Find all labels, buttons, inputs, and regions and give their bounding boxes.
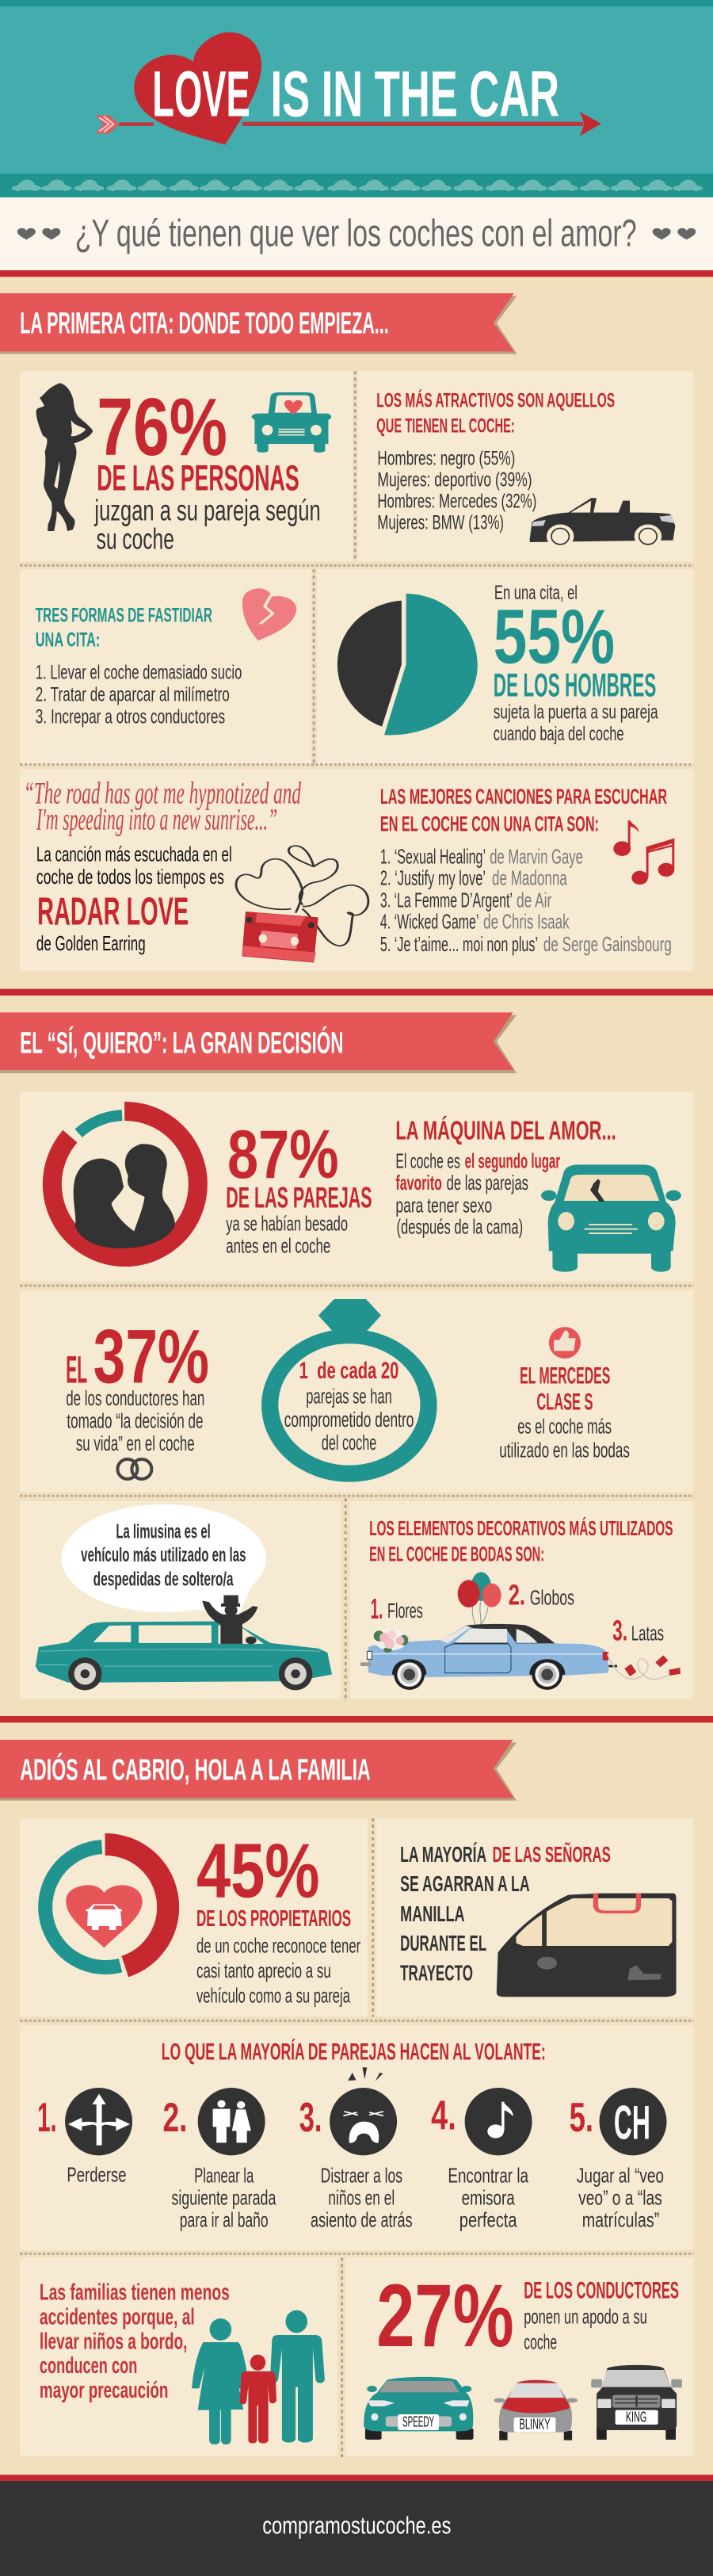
plate: king: KING: [626, 2409, 646, 2425]
pie chart: [337, 594, 478, 735]
divider: [312, 569, 316, 766]
icon: convertible car: [530, 498, 675, 548]
red divider: [0, 2475, 713, 2482]
text: la canción más escuchada: [36, 843, 232, 889]
item 5: jugar: 5.: [570, 2095, 593, 2140]
panel: estadísticas de boda: parejas se han: [306, 1384, 392, 1408]
text: segundo lugar: [395, 1149, 560, 1238]
item 2: planear parada: Planear la: [194, 2164, 254, 2187]
panel: limusina: vehículo más utilizado en las: [81, 1544, 246, 1566]
text: segundo lugar: El coche es: [395, 1149, 460, 1172]
text: apodo: coche: [524, 2330, 557, 2353]
text: apodo: [524, 2305, 647, 2353]
title: LOVE: [152, 59, 250, 130]
list of preferences: [377, 447, 536, 533]
icon: broken heart: [242, 588, 296, 640]
panel: tres formas de fastidiar: TRES FORMAS DE FASTIDIAR: [36, 604, 212, 626]
panel: estadísticas de boda: 37%: [93, 1314, 209, 1400]
text: segundo lugar: para tener sexo: [395, 1194, 492, 1217]
section: la primera cita, upper panels: DE LAS PERSONAS: [97, 459, 299, 498]
heading: UNA CITA:: [36, 629, 100, 651]
panel: lo que hacen las parejas: Encontrar la: [448, 2164, 528, 2187]
panel: elementos decorativos: Globos: [530, 1586, 574, 1609]
banner: la primera cita: [0, 293, 517, 354]
panel: 27 percent: [345, 2257, 693, 2456]
section: adiós al cabrio: de un coche reconoce tener: [196, 1934, 360, 1957]
section: la primera cita, upper panels: [20, 371, 693, 766]
panel: lo que hacen las parejas: siguiente parada: [171, 2186, 276, 2209]
icon: heart: [134, 32, 261, 145]
red divider: [0, 270, 713, 277]
icon: wedding car with balloons, flowers and cans: [360, 1572, 681, 1690]
text: mercedes clase s: CLASE S: [536, 1389, 593, 1415]
heading: [36, 604, 212, 651]
icon: black suv king: [591, 2365, 682, 2440]
panel: 27 percent: 27%: [376, 2265, 514, 2365]
quote: [24, 776, 301, 836]
section: al volante: [20, 2020, 693, 2250]
section: header: [0, 0, 713, 354]
text: las familias: llevar niños a bordo,: [40, 2329, 187, 2354]
text: sujeta la puerta: [494, 701, 658, 745]
row of small cars: [0, 174, 713, 197]
item 1: perderse: [37, 2088, 132, 2186]
section: familia y apodos: [0, 2253, 713, 2576]
plate: blinky: [514, 2415, 555, 2433]
text: la mayoría de las señoras: TRAYECTO: [400, 1961, 473, 1986]
song list: 4. ‘Wicked Game’: [380, 910, 479, 933]
song list: de Madonna: [492, 866, 567, 889]
footer: compramostucoche.es: [262, 2513, 451, 2540]
donut chart: [28, 1087, 223, 1282]
icon: kissing couple: [74, 1144, 175, 1248]
panel: 27 percent: SPEEDY: [402, 2414, 434, 2430]
panel: tres formas de fastidiar: 1. Llevar el coche demasiado sucio: [36, 661, 242, 683]
red divider: [0, 1716, 713, 1722]
panel: estadísticas de boda: [20, 1290, 693, 1492]
text: 1 de cada 20: del coche: [322, 1431, 376, 1454]
panel: estadísticas de boda: tomado “la decisión de: [67, 1408, 204, 1432]
panel: familias: Las familias tienen menos: [40, 2280, 230, 2305]
text: las familias: conducen con: [40, 2353, 137, 2378]
icon: teal car speedy: [364, 2377, 474, 2440]
panel: elementos decorativos: Flores: [387, 1599, 423, 1622]
label: flores: 1.: [371, 1593, 383, 1625]
banner: sí quiero: [0, 1012, 517, 1073]
item 1: perderse: 1.: [37, 2095, 57, 2140]
icon: limousine: [36, 1596, 332, 1690]
text: juzgan: [93, 494, 321, 555]
panel: 76 percent: [20, 371, 353, 561]
panel: los más atractivos: [358, 371, 693, 561]
icon: heart with car: [66, 1885, 143, 1947]
song list: de Chris Isaak: [483, 910, 570, 933]
panel: estadísticas de boda: comprometido dentro: [284, 1408, 414, 1431]
text: las familias: mayor precaución: [40, 2378, 168, 2402]
panel: lo que hacen las parejas: Perderse: [67, 2163, 127, 2186]
panel: tres formas de fastidiar: 2. Tratar de aparcar al milímetro: [36, 683, 230, 705]
panel: 27 percent: BLINKY: [520, 2415, 551, 2433]
icon: music notes: [613, 820, 674, 885]
icon: car door: [497, 1894, 677, 1997]
icon: cassette with tape: [236, 846, 368, 962]
icon: wedding rings: [117, 1459, 151, 1479]
panel: lo que hacen las parejas: Distraer a los: [321, 2164, 402, 2187]
arrow through heart: [96, 112, 601, 136]
song list: [380, 845, 672, 956]
item 2: planear parada: 2.: [162, 2095, 187, 2140]
panel: las señoras: [376, 1818, 693, 2016]
label: globos: [509, 1580, 574, 1611]
panel: 45 percent: [20, 1818, 368, 2016]
song list: de Air: [517, 889, 551, 912]
panel: lo que hacen las parejas: niños en el: [328, 2186, 395, 2209]
footer: [0, 2481, 713, 2576]
icon: wedding car: [360, 1624, 617, 1690]
icon: flowers: [374, 1628, 408, 1653]
item 4: encontrar emisora: perfecta: [459, 2208, 517, 2231]
icon: teal car with heart: [251, 392, 331, 453]
icon: balloons: [458, 1572, 501, 1625]
section: adiós al cabrio: [0, 1716, 713, 2016]
panel: familias: accidentes porque, al: [40, 2304, 195, 2329]
panel: tres formas de fastidiar: 3. Increpar a otros conductores: [36, 705, 225, 728]
heading: [380, 785, 667, 835]
icon: cans on strings: [608, 1654, 681, 1680]
heading: [369, 1517, 673, 1565]
item 4: encontrar emisora: emisora: [462, 2186, 515, 2209]
song list: 1. ‘Sexual Healing’: [380, 845, 486, 868]
panel: familias: [20, 2257, 337, 2456]
icon: thumb up: [549, 1327, 581, 1359]
section: sí quiero, first row: [0, 1012, 693, 1282]
panel: limusina: despedidas de soltero/a: [93, 1569, 234, 1590]
song list: 2. ‘Justify my love’: [380, 866, 486, 889]
text: juzgan: su coche: [97, 522, 174, 555]
panel: tres formas de fastidiar: [20, 569, 311, 766]
panel: elementos decorativos: [350, 1501, 693, 1699]
panel: estadísticas de boda: de los conductores han: [66, 1386, 204, 1410]
item 4: encontrar emisora: [431, 2088, 532, 2231]
panel: los más atractivos: Mujeres: BMW (13%): [377, 511, 504, 533]
section: adiós al cabrio: DE LOS PROPIETARIOS: [196, 1906, 351, 1931]
panel: lo que hacen las parejas: para ir al baño: [180, 2208, 269, 2231]
text: la mayoría de las señoras: LA MAYORÍA: [400, 1842, 486, 1867]
panel: lo que hacen las parejas: [20, 2025, 693, 2250]
label: globos: 2.: [509, 1580, 525, 1611]
panel: música: coche de todos los tiempos es: [36, 866, 224, 889]
panel: 87 percent and love machine: ya se habían besado: [226, 1212, 348, 1235]
banner: adiós al cabrio: [0, 1740, 517, 1801]
item 5: jugar: [570, 2088, 666, 2231]
panel: 76 percent: 76%: [97, 381, 227, 472]
item 2: planear parada: [162, 2088, 276, 2231]
subtitle strip: [0, 197, 713, 270]
text: besado: [226, 1212, 348, 1257]
plate: speedy: [398, 2414, 439, 2430]
panel: lo que hacen las parejas: asiento de atrás: [311, 2208, 413, 2231]
speech bubble: [61, 1504, 266, 1615]
panel: música: [20, 769, 693, 971]
donut chart: [32, 1834, 178, 1980]
divider: [353, 371, 357, 561]
panel: música: de Golden Earring: [36, 932, 146, 955]
list: [36, 661, 242, 728]
item 3: distraer a los niños: [299, 2067, 413, 2231]
section: adiós al cabrio: vehículo como a su pareja: [196, 1984, 350, 2007]
panel: 87 percent and love machine: DE LAS PAREJAS: [226, 1181, 372, 1213]
text: mercedes clase s: [499, 1363, 630, 1462]
text: la mayoría de las señoras: MANILLA: [400, 1902, 465, 1926]
panel: música: La canción más escuchada en el: [36, 843, 232, 866]
section: sí quiero, other rows: [20, 1286, 693, 1702]
panel: 87 percent and love machine: [20, 1087, 693, 1282]
stat: el 37%: [66, 1314, 209, 1400]
text: las familias: [40, 2280, 230, 2402]
teal hero background: [0, 0, 713, 174]
panel: 55 percent: En una cita, el: [494, 581, 578, 604]
section: canciones: [0, 765, 713, 996]
icon: red and gray car blinky: [494, 2380, 578, 2440]
panel: 87 percent and love machine: antes en el coche: [226, 1234, 330, 1257]
icon: woman silhouette: [36, 383, 93, 531]
panel: música: RADAR LOVE: [37, 889, 189, 933]
speech bubble: La limusina es el: [116, 1520, 211, 1542]
text: segundo lugar: de las parejas: [447, 1171, 528, 1194]
panel: 87 percent and love machine: 87%: [227, 1116, 339, 1192]
heading: [376, 389, 615, 437]
text: segundo lugar: favorito: [395, 1171, 442, 1194]
panel: 55 percent: [317, 569, 693, 766]
label: latas: 3.: [612, 1615, 627, 1646]
text: la mayoría de las señoras: DURANTE EL: [400, 1932, 486, 1955]
panel: limusina: [20, 1501, 341, 1699]
stat: el 37%: EL: [66, 1348, 87, 1391]
plate: king: [616, 2409, 658, 2425]
red divider: [0, 989, 713, 996]
section: la primera cita, upper panels: juzgan a su pareja según: [93, 494, 321, 526]
text: aprecio: [196, 1934, 360, 2007]
icon: teal car with arm: [541, 1164, 681, 1272]
text: decisión de su vida: [66, 1386, 204, 1455]
text: 1 de cada 20: [284, 1358, 414, 1454]
text: la mayoría de las señoras: [400, 1842, 611, 1986]
item 4: encontrar emisora: 4.: [431, 2093, 456, 2138]
panel: estadísticas de boda: 1 de cada 20: [299, 1358, 398, 1383]
icon: family: [192, 2310, 325, 2444]
section: adiós al cabrio: casi tanto aprecio a su: [196, 1959, 331, 1982]
panel: 45 percent: 45%: [196, 1828, 320, 1914]
item 3: distraer a los niños: 3.: [299, 2095, 322, 2140]
panel: elementos decorativos: Latas: [631, 1622, 664, 1645]
panel: estadísticas de boda: su vida” en el coche: [76, 1431, 195, 1455]
icon: ring: [261, 1299, 437, 1482]
